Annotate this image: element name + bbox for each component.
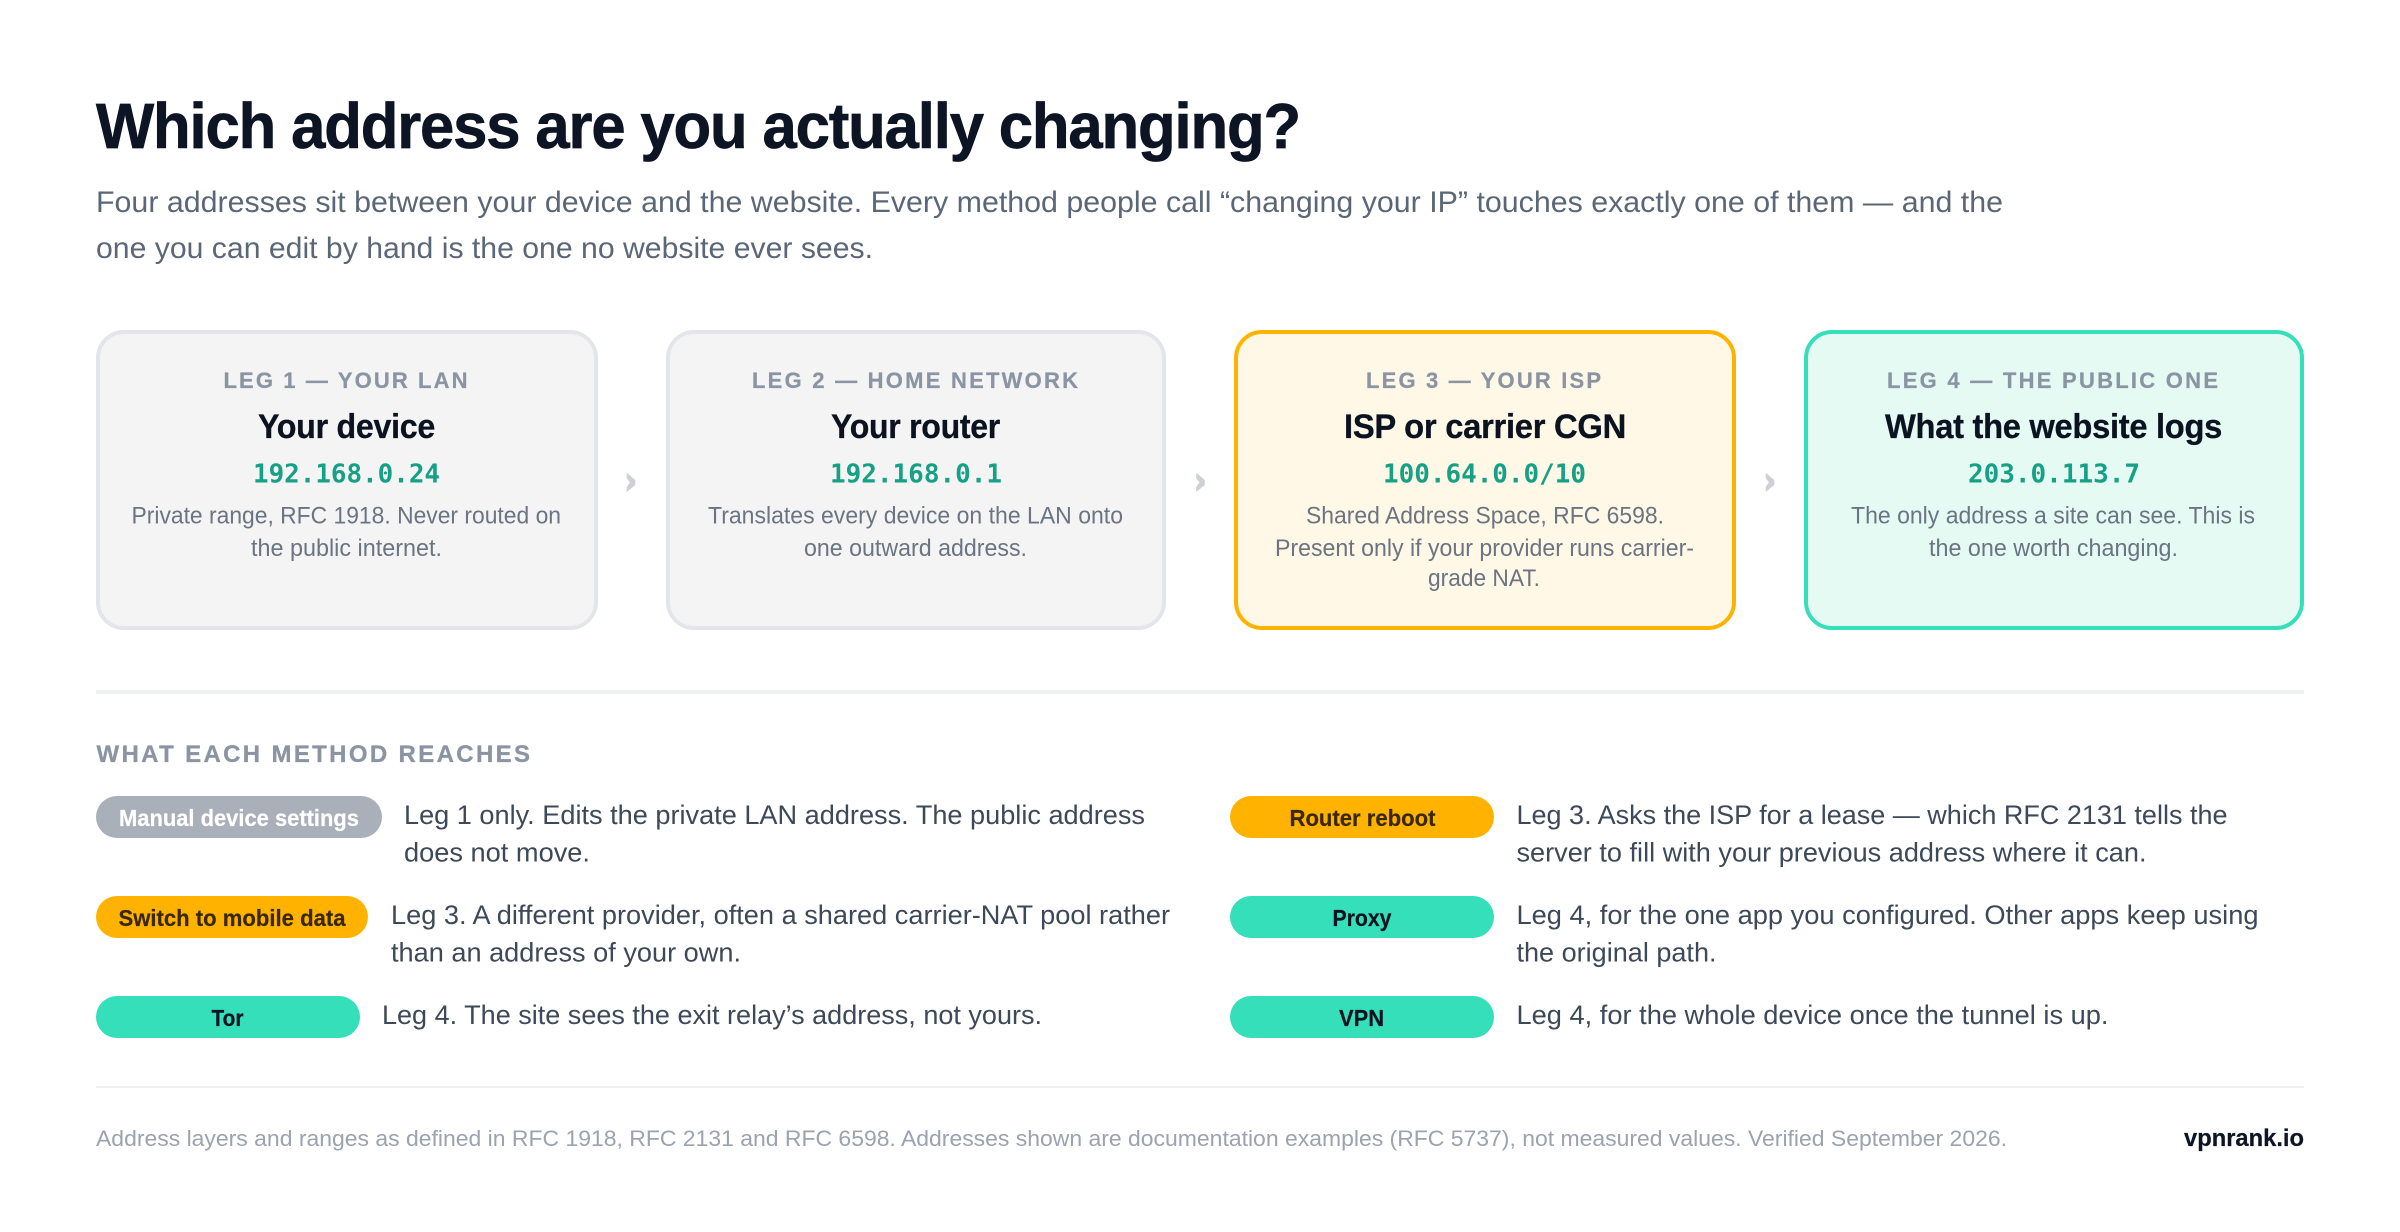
title: Which address are you actually changing? [96,90,1300,162]
leg 4 heading: What the website logs [1885,408,2222,446]
leg 3 description [1275,502,1694,592]
leg 1 description [132,502,561,562]
subtitle: Four addresses sit between your device and the website. Every method people call “changing your IP” touches exactly one of them — and the [96,186,2003,219]
panel: leg 3 ISP or carrier CGN [1236,332,1734,628]
method: manual device settings [96,796,1145,868]
leg 2 heading: Your router [831,408,1000,446]
method: tor [96,996,1042,1038]
method: tor: Tor [212,1005,244,1031]
arrow: leg 1 to leg 2 [627,473,635,492]
arrow: leg 3 to leg 4 [1766,473,1774,492]
panel: leg 2 your router [668,332,1164,628]
method: proxy: Proxy [1332,905,1392,931]
method: manual device settings: Leg 1 only. Edits the private LAN address. The public address [404,800,1145,830]
method: switch to mobile data: Leg 3. A different provider, often a shared carrier-NAT pool rather [391,900,1170,930]
subtitle [96,186,2003,265]
method: proxy [1230,896,2258,968]
method: vpn: Leg 4, for the whole device once the tunnel is up. [1516,1000,2108,1030]
method: vpn [1230,996,2108,1038]
method: proxy: Leg 4, for the one app you configured. Other apps keep using [1516,900,2258,930]
leg 2 address: 192.168.0.1 [830,460,1002,490]
method: switch to mobile data: Switch to mobile data [118,905,346,931]
subtitle: one you can edit by hand is the one no website ever sees. [96,232,873,265]
method: switch to mobile data [96,896,1170,968]
method: router reboot: Router reboot [1290,805,1436,831]
leg 1 description: Private range, RFC 1918. Never routed on [132,502,561,530]
leg 1 heading: Your device [258,408,435,446]
method: manual device settings: does not move. [404,838,590,868]
method: vpn: VPN [1339,1005,1384,1031]
method: router reboot: server to fill with your previous address where it can. [1516,838,2146,868]
method: router reboot: Leg 3. Asks the ISP for a lease — which RFC 2131 tells the [1516,800,2228,830]
leg 4 description: the one worth changing. [1929,535,2178,562]
method: router reboot [1230,796,2228,868]
leg 2 description: Translates every device on the LAN onto [708,502,1123,530]
leg 4 label: LEG 4 — THE PUBLIC ONE [1887,368,2218,393]
leg 3 description: Present only if your provider runs carrier- [1275,535,1694,562]
method: manual device settings: Manual device settings [119,805,359,831]
leg 2 description [708,502,1123,562]
leg 3 address: 100.64.0.0/10 [1383,460,1586,490]
leg 1 address: 192.168.0.24 [253,460,440,490]
section heading: WHAT EACH METHOD REACHES [96,741,530,768]
leg 3 label: LEG 3 — YOUR ISP [1366,368,1601,393]
leg 1 description: the public internet. [251,535,442,562]
panel: leg 4 what the website logs [1806,332,2302,628]
leg 3 description: grade NAT. [1428,565,1540,592]
leg 4 description: The only address a site can see. This is [1851,502,2255,530]
arrow: leg 2 to leg 3 [1196,473,1205,492]
method: tor: Leg 4. The site sees the exit relay’s address, not yours. [382,1000,1042,1030]
panel: leg 1 your device [98,332,596,628]
leg 3 heading: ISP or carrier CGN [1344,408,1626,446]
method: proxy: the original path. [1516,938,1716,968]
leg 1 label: LEG 1 — YOUR LAN [224,368,468,393]
method: switch to mobile data: than an address of your own. [391,938,741,968]
leg 3 description: Shared Address Space, RFC 6598. [1306,502,1664,530]
leg 2 description: one outward address. [804,535,1027,562]
leg 4 description [1851,502,2255,562]
leg 4 address: 203.0.113.7 [1968,460,2140,490]
leg 2 label: LEG 2 — HOME NETWORK [752,368,1078,393]
brand: vpnrank.io [2184,1125,2304,1152]
footer note: Address layers and ranges as defined in RFC 1918, RFC 2131 and RFC 6598. Addresses shown are documentation examples (RFC 5737), not measured values. Verified September 2026. [96,1126,2007,1151]
